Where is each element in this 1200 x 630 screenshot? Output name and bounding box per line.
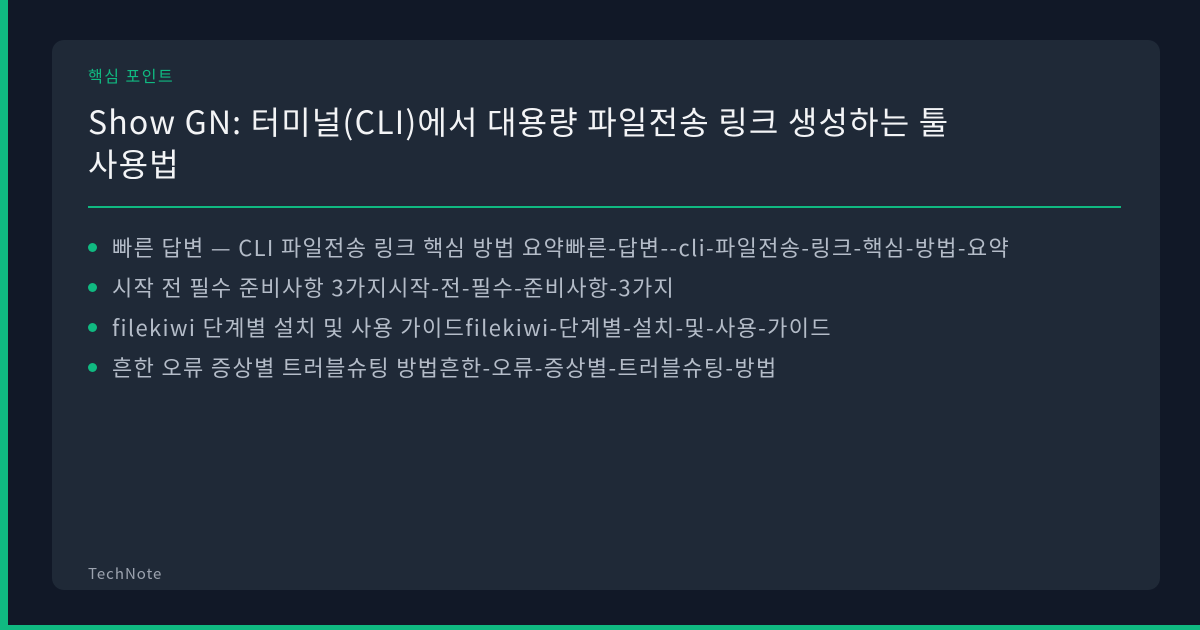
kicker label: 핵심 포인트	[88, 63, 174, 87]
bullet list	[88, 231, 1010, 383]
bullet 3: filekiwi 단계별 설치 및 사용 가이드filekiwi-단계별-설치-및-사용-가이드	[112, 311, 832, 343]
title: Show GN: 터미널(CLI)에서 대용량 파일전송 링크 생성하는 툴	[88, 98, 949, 144]
footer brand: TechNote	[88, 563, 162, 584]
bullet 1: 빠른 답변 — CLI 파일전송 링크 핵심 방법 요약빠른-답변--cli-파일전송-링크-핵심-방법-요약	[112, 231, 1010, 263]
title: 사용법	[88, 140, 180, 186]
title	[88, 98, 949, 186]
bullet 4: 흔한 오류 증상별 트러블슈팅 방법흔한-오류-증상별-트러블슈팅-방법	[112, 351, 778, 383]
bullet 2: 시작 전 필수 준비사항 3가지시작-전-필수-준비사항-3가지	[112, 271, 675, 303]
